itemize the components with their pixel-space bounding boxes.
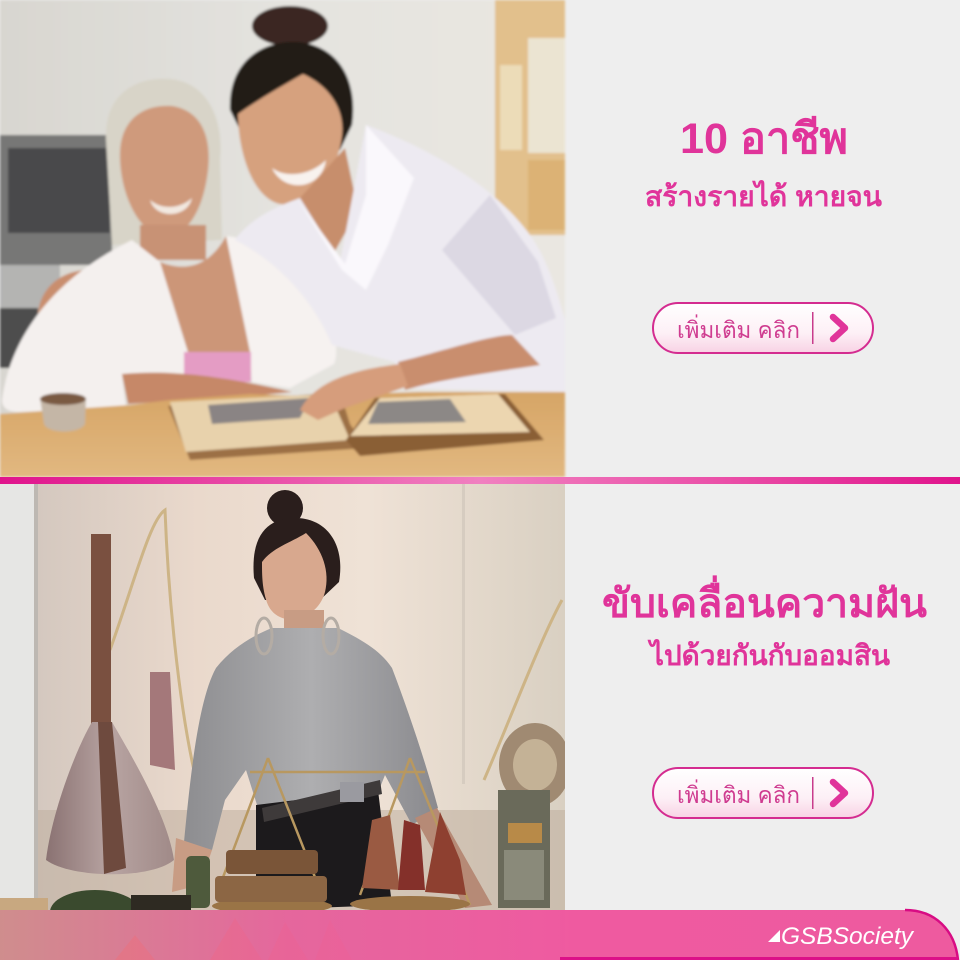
icon: chevron	[833, 782, 845, 804]
earrings	[256, 618, 339, 654]
divider bar	[0, 477, 960, 484]
panel: bottom band	[0, 910, 958, 960]
heading: สร้างรายได้ หายจน: สร้างรายได้ หายจน	[645, 180, 882, 212]
old woman	[2, 79, 336, 412]
cardigan left	[2, 240, 188, 412]
panel: top photo	[0, 0, 565, 477]
white shirt	[235, 125, 565, 392]
button: more click bottom	[653, 768, 873, 818]
faded product shapes	[115, 918, 352, 960]
cardigan right	[226, 236, 336, 388]
plant	[0, 890, 131, 910]
open book	[168, 364, 544, 460]
heading: ไปด้วยกันกับออมสิน: ไปด้วยกันกับออมสิน	[647, 639, 890, 671]
old woman's forearm	[122, 373, 292, 404]
info stand	[498, 790, 550, 908]
panel: bottom photo	[0, 484, 565, 910]
hanging bag	[46, 534, 174, 874]
young woman's arm behind shoulder	[38, 270, 100, 320]
belt	[262, 780, 382, 822]
dark office background	[0, 135, 112, 368]
cup	[40, 393, 86, 432]
logo: GSBSociety: GSBSociety	[781, 923, 915, 950]
table	[0, 392, 565, 477]
wrapped bundles right	[499, 723, 565, 803]
straps	[150, 672, 175, 770]
chest	[160, 236, 250, 352]
shelf	[495, 0, 565, 235]
button: more click top: เพิ่มเติม คลิก	[677, 314, 800, 343]
young woman	[230, 6, 565, 392]
young woman's forearm	[398, 335, 540, 390]
product stands	[186, 758, 470, 914]
button: more click bottom: เพิ่มเติม คลิก	[677, 779, 800, 808]
icon: chevron	[833, 317, 845, 339]
trousers	[256, 790, 392, 910]
bamboo poles	[110, 510, 562, 780]
heading: 10 อาชีพ: 10 อาชีพ	[680, 115, 848, 163]
woman	[172, 490, 492, 910]
heading: ขับเคลื่อนความฝัน: ขับเคลื่อนความฝัน	[602, 575, 927, 626]
young woman's hand	[300, 364, 408, 420]
pink top	[184, 352, 251, 382]
sweater	[184, 628, 438, 850]
button: more click top	[653, 303, 873, 353]
